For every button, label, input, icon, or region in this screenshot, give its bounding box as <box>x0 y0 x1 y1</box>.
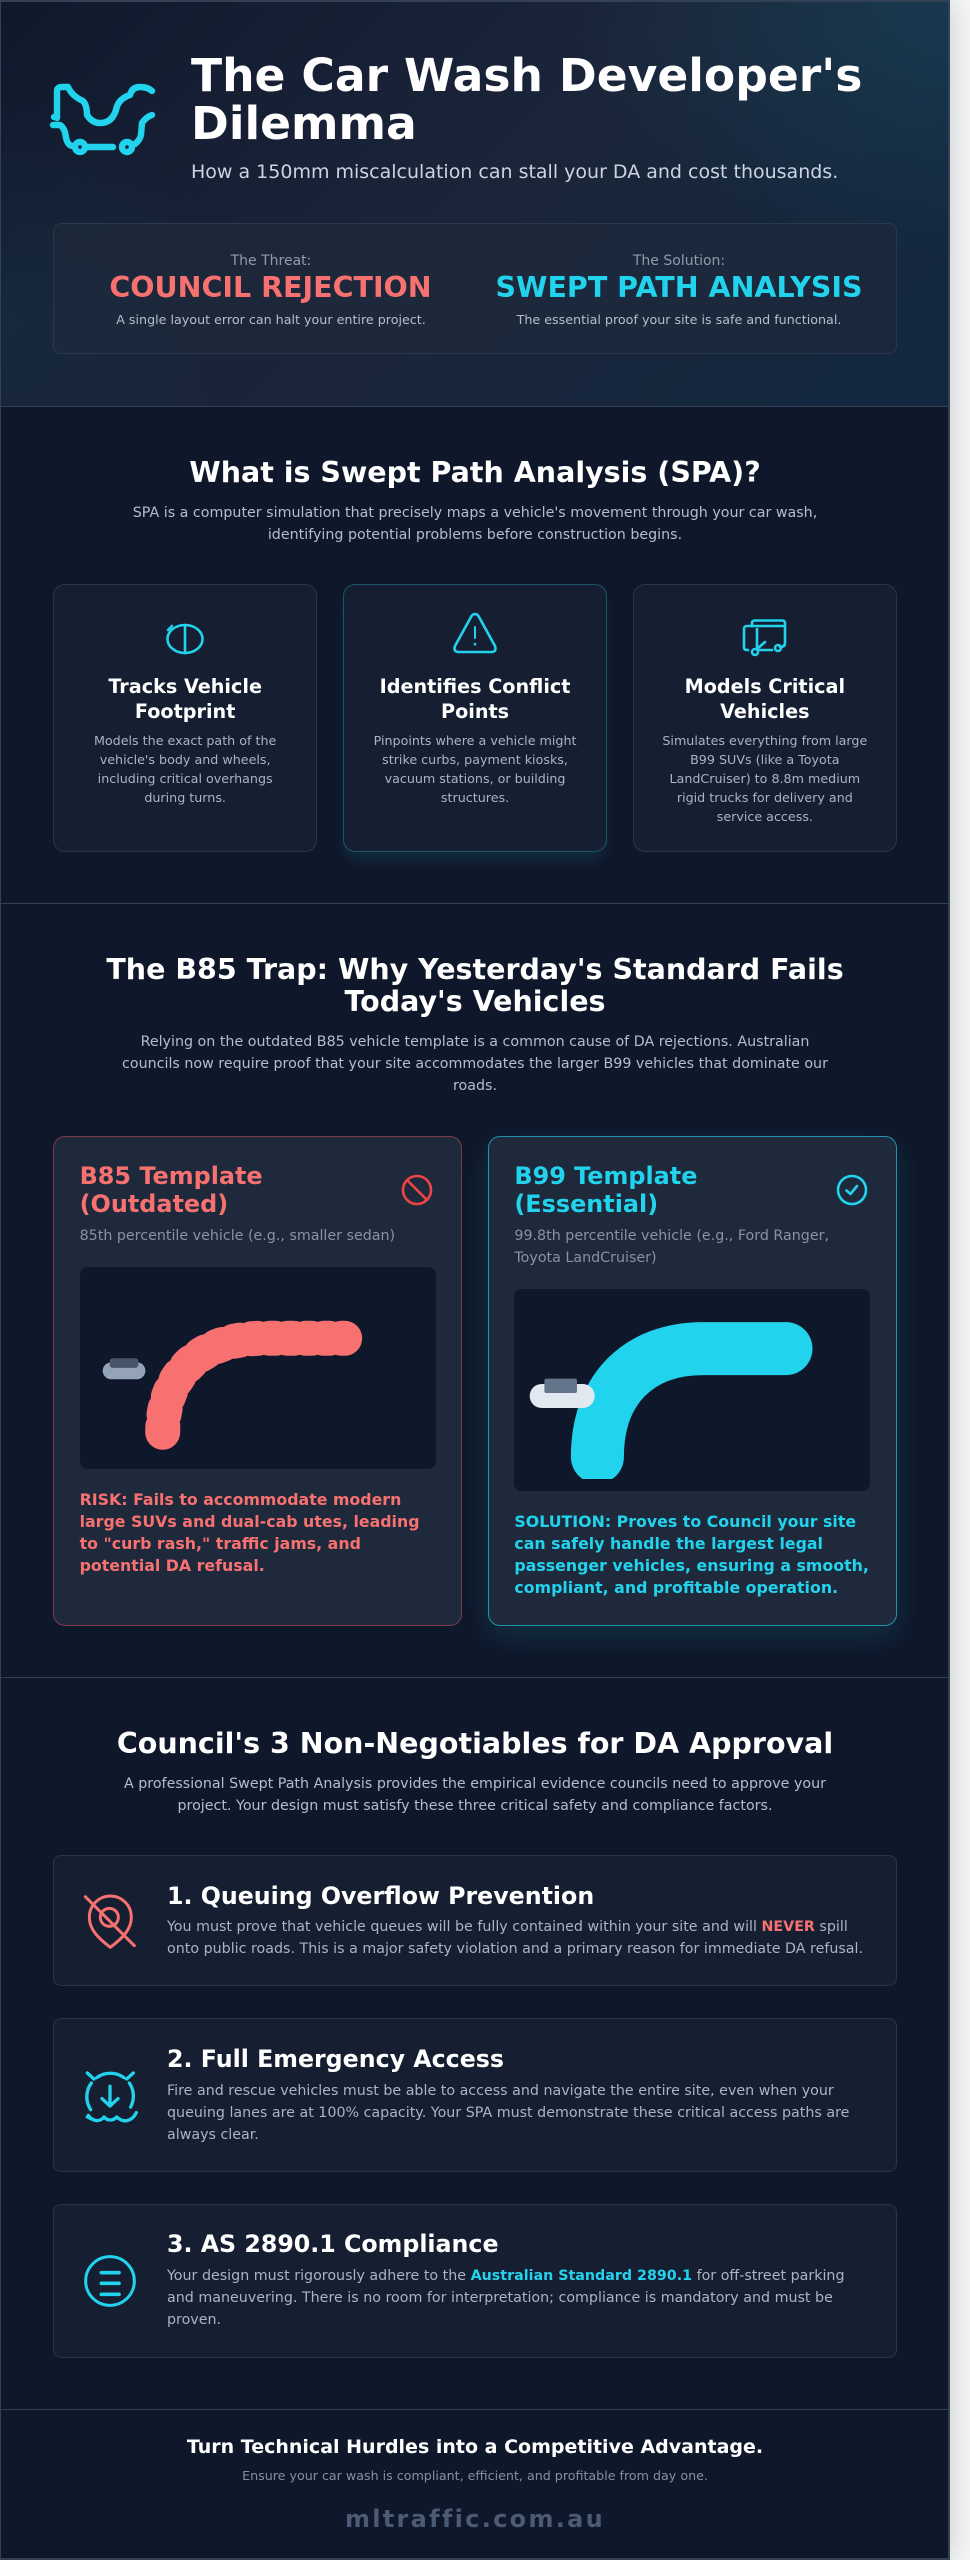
card heading <box>80 1162 263 1218</box>
card title: Points <box>441 700 509 723</box>
item text: always clear. <box>167 2127 259 2143</box>
card title: Vehicles <box>720 700 810 723</box>
card text: B99 SUVs (like a Toyota <box>690 752 840 767</box>
item title: 3. AS 2890.1 Compliance <box>167 2230 499 2258</box>
item title: 1. Queuing Overflow Prevention <box>167 1882 594 1910</box>
heading: council rejection: COUNCIL REJECTION <box>109 271 432 304</box>
panel: queuing overflow prevention <box>53 1855 897 1986</box>
text: intro: identifying potential problems before construction begins. <box>268 527 682 543</box>
card text: vehicle's body and wheels, <box>100 752 271 767</box>
card text <box>374 732 576 805</box>
item text: and maneuvering. There is no room for interpretation; compliance is mandatory and must be <box>167 2290 833 2306</box>
icon: truck <box>742 619 786 656</box>
item text <box>167 2083 849 2143</box>
card subtitle: 99.8th percentile vehicle (e.g., Ford Ranger, <box>514 1228 829 1244</box>
heading: What is Swept Path Analysis (SPA)? <box>189 456 761 489</box>
solution text: SOLUTION: Proves to Council your site <box>514 1512 856 1530</box>
icon: no location <box>84 1894 136 1949</box>
card heading: B85 Template <box>80 1162 263 1190</box>
card text: service access. <box>717 809 813 824</box>
text: intro: SPA is a computer simulation that precisely maps a vehicle's movement through your car wash, <box>133 505 817 521</box>
card heading: B99 Template <box>514 1162 697 1190</box>
item text: onto public roads. This is a major safety violation and a primary reason for immediate DA refusal. <box>167 1941 863 1957</box>
car body <box>102 1362 145 1379</box>
solution text <box>514 1512 869 1596</box>
subtitle: How a 150mm miscalculation can stall your DA and cost thousands. <box>191 161 838 183</box>
item title: 2. Full Emergency Access <box>167 2044 504 2072</box>
panel: the B85 trap <box>0 904 950 1678</box>
panel: B99 template <box>488 1136 897 1626</box>
card text: Pinpoints where a vehicle might <box>374 732 576 748</box>
card text: strike curbs, payment kiosks, <box>382 752 568 767</box>
solution text: can safely handle the largest legal <box>514 1534 823 1552</box>
text: intro <box>122 1034 828 1094</box>
card: models critical vehicles <box>633 584 897 852</box>
panel: council's non-negotiables <box>0 1678 950 2410</box>
card text <box>662 732 867 824</box>
card title: Tracks Vehicle <box>108 675 262 698</box>
heading <box>106 953 844 1018</box>
icon: emergency access <box>85 2071 138 2122</box>
panel: footer <box>186 2436 763 2533</box>
text: intro <box>124 1776 826 1814</box>
chart: B99 swept path diagram <box>514 1289 870 1491</box>
card title: Identifies Conflict <box>380 675 570 698</box>
card subtitle <box>514 1228 829 1266</box>
card title <box>108 675 262 723</box>
card: tracks vehicle footprint <box>53 584 317 852</box>
solution text: compliant, and profitable operation. <box>514 1578 838 1596</box>
item text <box>167 1919 863 1957</box>
item text <box>167 2268 845 2328</box>
panel: B85 template <box>53 1136 462 1626</box>
footer text: Ensure your car wash is compliant, efficient, and profitable from day one. <box>242 2468 708 2483</box>
panel: threat and solution <box>53 223 897 354</box>
risk text <box>80 1490 420 1575</box>
footer heading: Turn Technical Hurdles into a Competitive Advantage. <box>187 2436 763 2458</box>
car body <box>530 1384 595 1408</box>
footer website: mltraffic.com.au <box>345 2505 605 2533</box>
title: Dilemma <box>191 97 417 150</box>
card text: structures. <box>441 790 509 805</box>
card title <box>685 675 845 723</box>
card text: Simulates everything from large <box>662 732 867 748</box>
text: intro: councils now require proof that your site accommodates the larger B99 vehicles that dominate our <box>122 1056 828 1072</box>
text: intro: A professional Swept Path Analysis provides the empirical evidence councils need to approve your <box>124 1776 826 1792</box>
card heading <box>514 1162 697 1218</box>
heading: Today's Vehicles <box>344 985 606 1018</box>
panel: what is swept path analysis <box>0 407 950 904</box>
heading: swept path analysis: SWEPT PATH ANALYSIS <box>496 271 862 304</box>
item text: Your design must rigorously adhere to the Australian Standard 2890.1 for off-street parking <box>167 2268 845 2284</box>
item text: Fire and rescue vehicles must be able to access and navigate the entire site, even when your <box>167 2083 834 2099</box>
item text: You must prove that vehicle queues will be fully contained within your site and will NEVER spill <box>167 1919 848 1935</box>
swept path <box>162 1338 344 1432</box>
solution text: passenger vehicles, ensuring a smooth, <box>514 1556 869 1574</box>
card subtitle: 85th percentile vehicle (e.g., smaller sedan) <box>80 1228 395 1244</box>
label: the threat: The Threat: <box>231 253 311 269</box>
risk text: potential DA refusal. <box>80 1556 265 1575</box>
text: intro <box>133 505 817 543</box>
card title <box>380 675 570 723</box>
card heading: (Outdated) <box>80 1190 228 1218</box>
card text: LandCruiser) to 8.8m medium <box>669 771 860 786</box>
card text: during turns. <box>144 790 226 805</box>
heading: The B85 Trap: Why Yesterday's Standard Fails <box>106 953 844 986</box>
icon: check circle <box>836 1174 868 1206</box>
panel: AS 2890.1 compliance <box>53 2204 897 2358</box>
card text: including critical overhangs <box>98 771 273 786</box>
item text: proven. <box>167 2312 221 2328</box>
card text: vacuum stations, or building <box>385 771 565 786</box>
icon: prohibited <box>402 1174 432 1206</box>
text: threat detail: A single layout error can halt your entire project. <box>116 312 426 327</box>
icon: car wash vehicle <box>50 84 156 156</box>
heading: Council's 3 Non-Negotiables for DA Approval <box>117 1727 833 1760</box>
text: intro: project. Your design must satisfy these three critical safety and compliance factors. <box>178 1798 772 1814</box>
card title: Models Critical <box>685 675 845 698</box>
panel: full emergency access <box>53 2018 897 2172</box>
panel: header <box>0 0 950 407</box>
card text: rigid trucks for delivery and <box>677 790 853 805</box>
text: solution detail: The essential proof your site is safe and functional. <box>517 312 841 327</box>
risk text: RISK: Fails to accommodate modern <box>80 1490 401 1509</box>
card heading: (Essential) <box>514 1190 658 1218</box>
icon: standards list <box>84 2255 136 2307</box>
title: The Car Wash Developer's <box>191 49 862 102</box>
item text: queuing lanes are at 100% capacity. Your SPA must demonstrate these critical access paths are <box>167 2105 849 2121</box>
card text: Models the exact path of the <box>94 732 276 748</box>
card text <box>94 732 276 805</box>
card subtitle: Toyota LandCruiser) <box>514 1250 657 1266</box>
car roof <box>545 1379 577 1393</box>
icon: footprint <box>166 624 204 654</box>
icon: warning triangle <box>453 612 497 654</box>
swept path <box>598 1349 786 1457</box>
risk text: to "curb rash," traffic jams, and <box>80 1534 361 1553</box>
title <box>191 49 862 150</box>
card: identifies conflict points <box>343 584 607 852</box>
risk text: large SUVs and dual-cab utes, leading <box>80 1512 420 1531</box>
text: intro: roads. <box>453 1078 497 1094</box>
label: the solution: The Solution: <box>633 253 725 269</box>
chart: B85 swept path diagram <box>80 1267 436 1469</box>
car roof <box>109 1358 138 1368</box>
text: intro: Relying on the outdated B85 vehicle template is a common cause of DA rejections. Australian <box>141 1034 809 1050</box>
card title: Footprint <box>135 700 235 723</box>
